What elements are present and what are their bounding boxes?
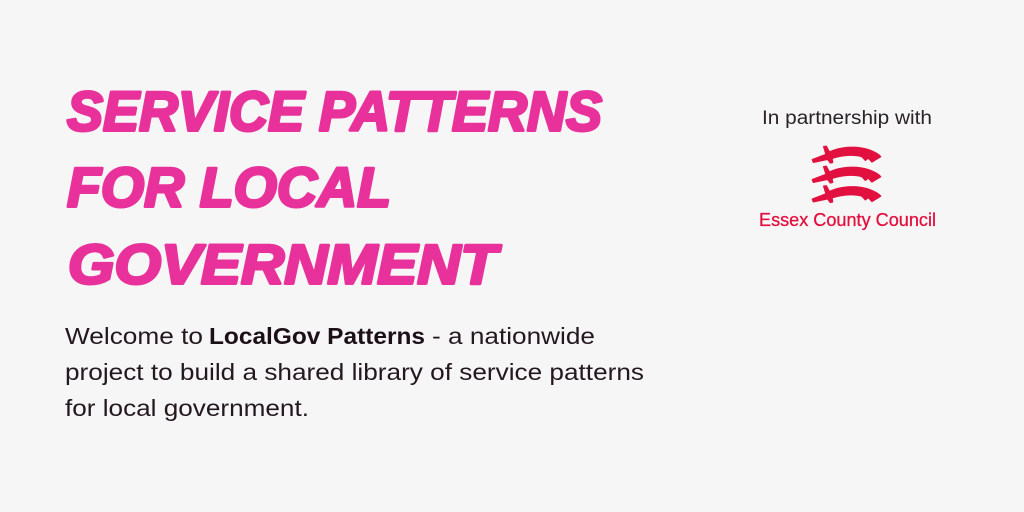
title: FOR LOCAL	[67, 156, 391, 218]
title: SERVICE PATTERNS	[67, 80, 602, 142]
intro text	[65, 323, 644, 421]
icon: three seaxes	[812, 146, 881, 202]
logo wordmark: Essex County Council	[759, 209, 936, 230]
logo: Essex County Council	[759, 146, 936, 230]
title: GOVERNMENT	[68, 232, 502, 296]
intro text: - a nationwide	[432, 323, 595, 349]
intro text: for local government.	[65, 395, 309, 421]
intro text: LocalGov Patterns	[209, 323, 425, 349]
intro text: project to build a shared library of service patterns	[65, 359, 644, 385]
title	[67, 80, 602, 296]
intro text: Welcome to	[65, 323, 203, 349]
partnership label: In partnership with	[762, 108, 932, 129]
